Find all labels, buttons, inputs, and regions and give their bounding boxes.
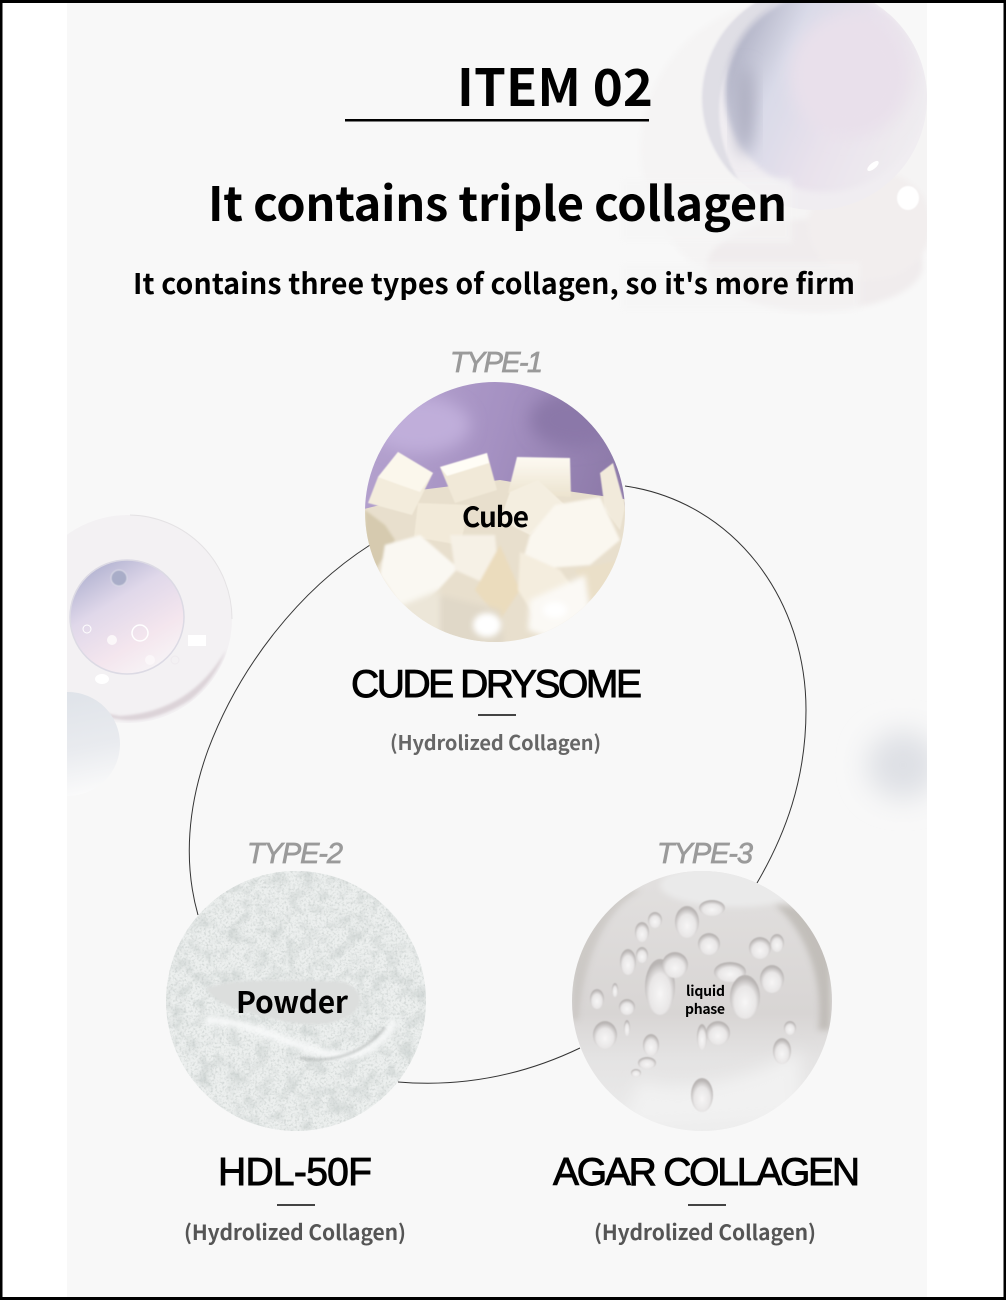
subtitle: It contains three types of collagen, so it's more firm: [133, 262, 855, 303]
title: It contains triple collagen: [208, 166, 787, 235]
circle: cube image: [360, 382, 630, 650]
connecting ring: [189, 486, 806, 1083]
decoration: white ball left: [67, 692, 120, 770]
label: Powder: Powder: [236, 978, 349, 1022]
label: TYPE-3: TYPE-3: [657, 838, 753, 870]
label: Cube: Cube: [462, 496, 529, 536]
circle: liquid image: [572, 863, 832, 1131]
decoration: pearl bubble top right: [701, 3, 927, 304]
decoration: text backdrop bands: [620, 178, 860, 312]
decoration: blurred ball right: [867, 731, 939, 799]
sublabel: Hydrolized Collagen 3: (Hydrolized Collagen): [594, 1217, 816, 1247]
dash: [277, 1204, 315, 1206]
label: TYPE-1: TYPE-1: [450, 347, 543, 379]
name: CUDE DRYSOME: CUDE DRYSOME: [351, 663, 642, 706]
sublabel: Hydrolized Collagen 2: (Hydrolized Collagen): [184, 1217, 406, 1247]
label: TYPE-2: TYPE-2: [247, 838, 343, 870]
heading: ITEM 02: ITEM 02: [457, 47, 653, 121]
label: liquid phase: [685, 981, 725, 1019]
circle: powder image: [166, 871, 426, 1131]
sublabel: Hydrolized Collagen 1: (Hydrolized Collagen): [390, 727, 601, 756]
name: AGAR COLLAGEN: AGAR COLLAGEN: [553, 1151, 860, 1194]
name: HDL-50F: HDL-50F: [218, 1151, 372, 1194]
dash: [688, 1204, 726, 1206]
decoration: water bubble left: [69, 514, 232, 722]
label: liquid phase: phase: [685, 999, 725, 1019]
label: liquid phase: liquid: [686, 981, 725, 1001]
dash: [478, 714, 516, 716]
